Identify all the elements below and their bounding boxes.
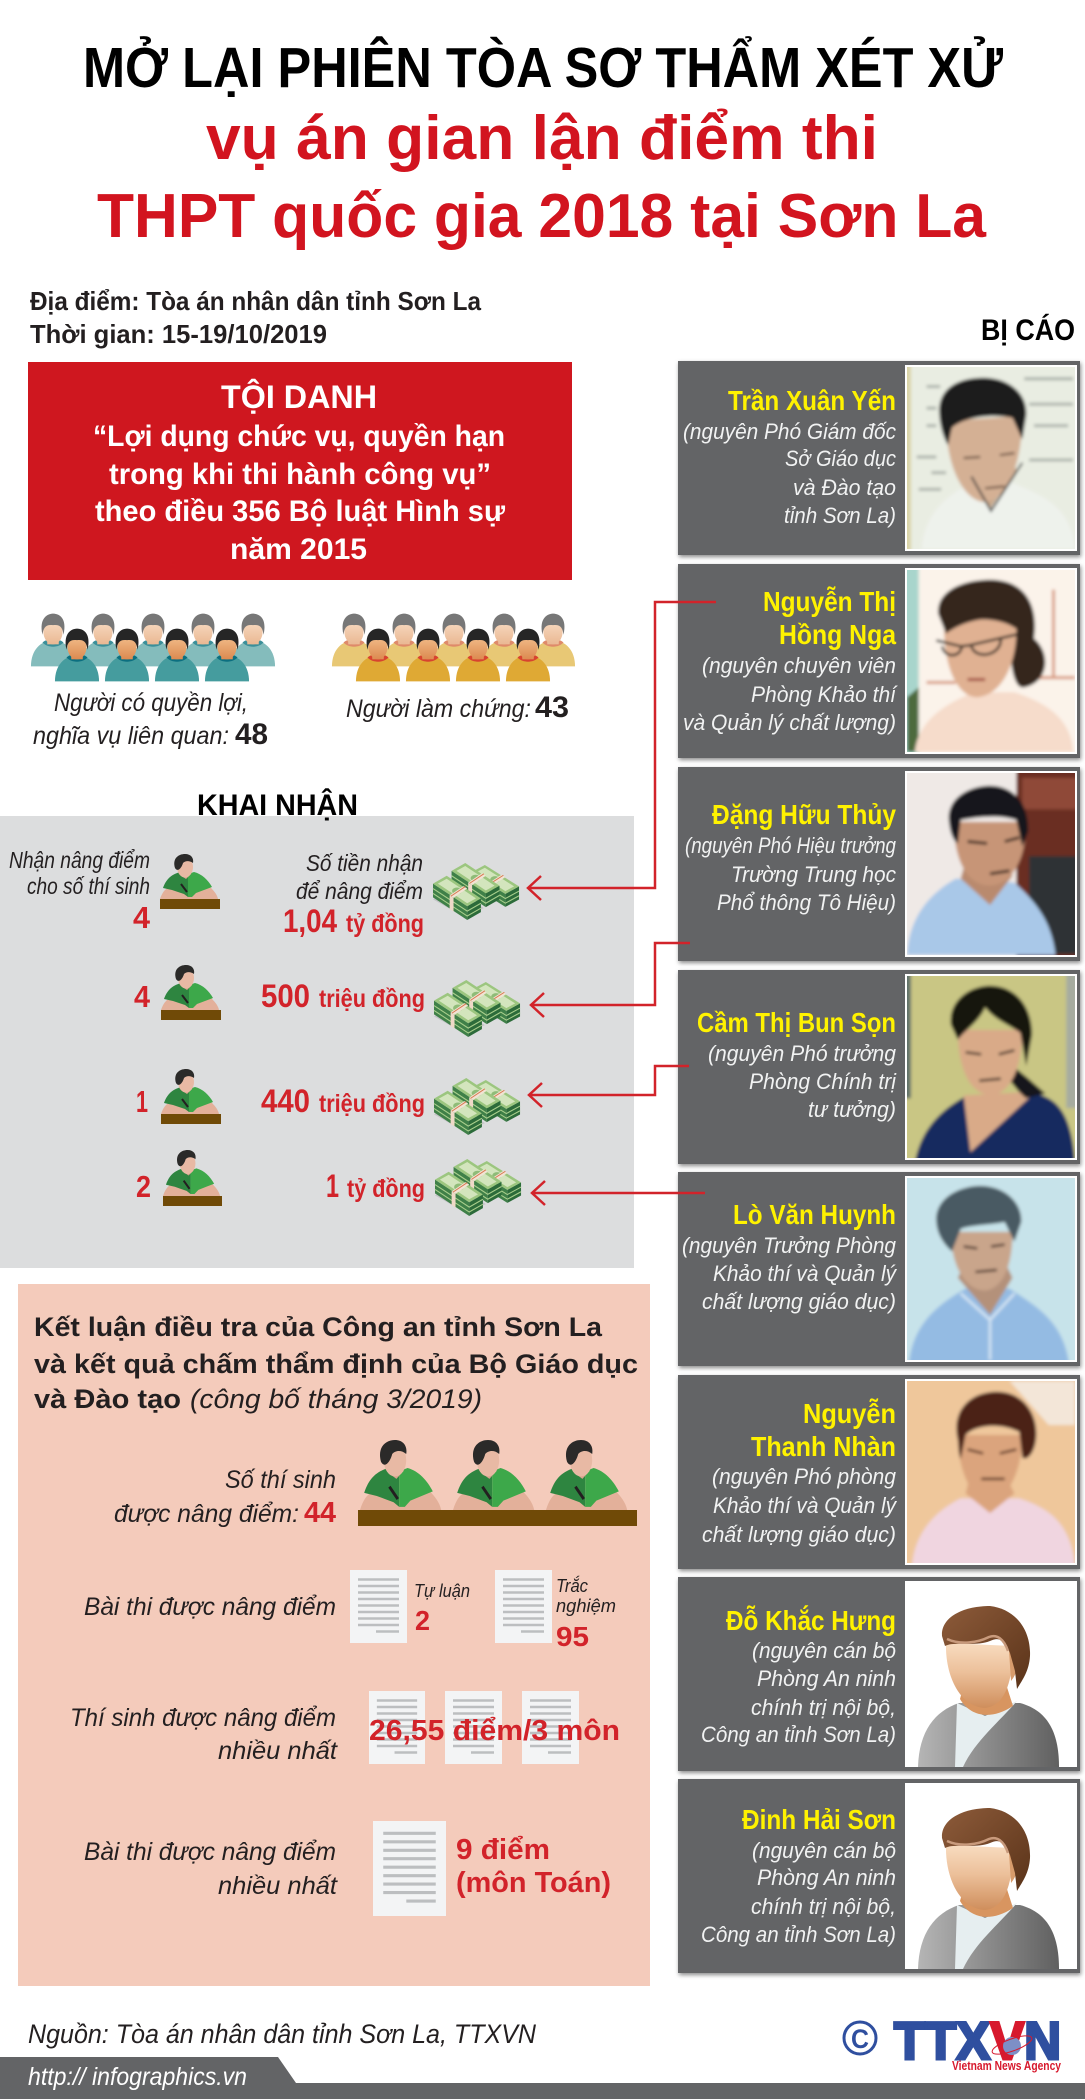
card: Lò Văn Huynh: Khảo thí và Quản lý <box>713 1261 898 1286</box>
card: Đỗ Khắc Hưng: (nguyên cán bộ <box>752 1638 896 1663</box>
location and time <box>30 286 481 349</box>
card: Nguyễn Thị Hồng Nga <box>678 564 1081 760</box>
card: Nguyễn Thanh Nhàn: Nguyễn <box>803 1398 896 1429</box>
confession heading: KHAI NHẬN <box>197 788 358 822</box>
arrow: Nguyễn Thị Hồng Nga to row 1 <box>528 602 716 900</box>
website: http:// infographics.vn <box>28 2063 247 2091</box>
card: Đặng Hữu Thủy: (nguyên Phó Hiệu trưởng <box>685 833 896 858</box>
students raised label: được nâng điểm: <box>114 1500 299 1528</box>
card: Đỗ Khắc Hưng <box>678 1577 1081 1773</box>
witnesses label: Người làm chứng: <box>346 695 531 723</box>
card: Nguyễn Thị Hồng Nga: Phòng Khảo thí <box>751 682 899 707</box>
row 1: 1,04 <box>283 903 337 939</box>
row 2: triệu đồng <box>319 985 425 1013</box>
card: Trần Xuân Yến: và Đào tạo <box>793 475 896 500</box>
column label: money <box>296 850 423 904</box>
card: Trần Xuân Yến: tỉnh Sơn La) <box>784 503 896 528</box>
footer bar <box>0 2057 1085 2099</box>
card: Đinh Hải Sơn: Công an tỉnh Sơn La) <box>701 1922 896 1947</box>
row 4 <box>136 1150 521 1216</box>
logo <box>844 2012 1062 2073</box>
charge text: “Lợi dụng chức vụ, quyền hạn <box>93 420 505 453</box>
card: Nguyễn Thị Hồng Nga: và Quản lý chất lượng) <box>683 710 896 735</box>
row 4: 2 <box>136 1169 151 1204</box>
conclusion heading: (công bố tháng 3/2019) <box>190 1384 482 1414</box>
card: Đặng Hữu Thủy <box>678 767 1081 963</box>
related persons label: Người có quyền lợi, <box>54 689 248 717</box>
TTXVN wordmark: TTXVN <box>894 2012 1061 2071</box>
charge heading: TỘI DANH <box>221 379 377 415</box>
card: Lò Văn Huynh <box>678 1172 1081 1368</box>
row 4: tỷ đồng <box>347 1175 425 1203</box>
conclusion heading: Kết luận điều tra của Công an tỉnh Sơn La <box>34 1312 603 1342</box>
row 1: 4 <box>133 900 151 935</box>
papers raised row: 2 <box>415 1605 430 1636</box>
card: Trần Xuân Yến: (nguyên Phó Giám đốc <box>683 419 896 444</box>
arrow: Đặng Hữu Thủy to row 2 <box>531 943 690 1017</box>
card: Đặng Hữu Thủy: Đặng Hữu Thủy <box>712 799 896 830</box>
related persons label: nghĩa vụ liên quan: <box>33 722 229 750</box>
top paper raised row: 9 điểm <box>456 1834 550 1866</box>
top paper raised row <box>84 1821 611 1916</box>
charge text: theo điều 356 Bộ luật Hình sự <box>95 495 505 528</box>
card: Nguyễn Thanh Nhàn: chất lượng giáo dục) <box>702 1522 896 1547</box>
card: Đỗ Khắc Hưng: Phòng An ninh <box>757 1666 896 1691</box>
card: Đinh Hải Sơn: chính trị nội bộ, <box>751 1894 896 1919</box>
card: Nguyễn Thị Hồng Nga: Nguyễn Thị <box>763 586 896 617</box>
icon group: witnesses <box>332 614 575 681</box>
portrait <box>907 1178 1075 1360</box>
arrow: Cầm Thị Bun Sọn to row 3 <box>529 1066 689 1107</box>
card: Lò Văn Huynh: Lò Văn Huynh <box>733 1199 896 1230</box>
row 1 <box>133 854 519 939</box>
source: Nguồn: Tòa án nhân dân tỉnh Sơn La, TTXVN <box>28 2019 536 2049</box>
panel: investigation conclusion <box>18 1284 650 1986</box>
papers raised row: Bài thi được nâng điểm <box>84 1593 336 1621</box>
card: Cầm Thị Bun Sọn: (nguyên Phó trưởng <box>708 1041 896 1066</box>
copyright mark <box>844 2022 876 2054</box>
row 3: triệu đồng <box>319 1090 425 1118</box>
top student raised row: nhiều nhất <box>218 1737 338 1765</box>
charge text <box>93 420 505 566</box>
students raised label: Số thí sinh <box>225 1466 336 1494</box>
card: Nguyễn Thị Hồng Nga: Hồng Nga <box>779 619 896 650</box>
row 4: 1 <box>326 1168 339 1204</box>
portrait <box>907 1381 1075 1563</box>
card: Đặng Hữu Thủy: Phổ thông Tô Hiệu) <box>717 890 896 915</box>
papers raised row: 95 <box>556 1621 589 1652</box>
card: Trần Xuân Yến: Trần Xuân Yến <box>728 385 896 416</box>
papers raised row: Tự luận <box>414 1581 470 1601</box>
top student raised row <box>70 1691 620 1765</box>
top paper raised row: nhiều nhất <box>218 1872 338 1900</box>
card: Trần Xuân Yến <box>678 361 1081 557</box>
icon group: related persons <box>31 614 275 681</box>
row 2: 4 <box>134 979 151 1014</box>
card: Nguyễn Thanh Nhàn: (nguyên Phó phòng <box>712 1464 896 1489</box>
card: Nguyễn Thanh Nhàn: Thanh Nhàn <box>751 1431 896 1462</box>
icon: anonymous avatar <box>918 1606 1059 1767</box>
card: Đinh Hải Sơn: Đinh Hải Sơn <box>742 1804 896 1835</box>
column label: money: để nâng điểm <box>296 878 423 904</box>
witnesses label: 43 <box>535 691 569 724</box>
card: Nguyễn Thanh Nhàn <box>678 1375 1081 1571</box>
card: Đỗ Khắc Hưng: chính trị nội bộ, <box>751 1695 896 1720</box>
panel: confession <box>0 788 634 1268</box>
related persons label <box>33 689 268 751</box>
card: Đặng Hữu Thủy: Trường Trung học <box>731 862 896 887</box>
card: Trần Xuân Yến: Sở Giáo dục <box>785 446 896 471</box>
top student raised row: Thí sinh được nâng điểm <box>70 1704 336 1732</box>
column label: students: cho số thí sinh <box>27 873 150 899</box>
card: Lò Văn Huynh: chất lượng giáo dục) <box>702 1289 896 1314</box>
charge text: trong khi thi hành công vụ” <box>109 458 491 491</box>
card: Cầm Thị Bun Sọn <box>678 970 1081 1166</box>
row 3: 440 <box>261 1083 310 1119</box>
title line 2: vụ án gian lận điểm thi <box>206 104 878 173</box>
card: Đinh Hải Sơn <box>678 1779 1081 1975</box>
top student raised row: 26,55 điểm/3 môn <box>369 1715 620 1747</box>
conclusion heading <box>34 1312 638 1414</box>
students raised label <box>114 1466 336 1529</box>
conclusion heading: và kết quả chấm thẩm định của Bộ Giáo dục <box>34 1349 638 1379</box>
row 2 <box>134 965 520 1037</box>
panel: charge <box>28 362 572 580</box>
portrait <box>907 367 1075 549</box>
location: Địa điểm: Tòa án nhân dân tỉnh Sơn La <box>30 286 481 316</box>
copyright mark: C <box>851 2024 869 2054</box>
row 3 <box>136 1069 520 1135</box>
portrait <box>907 976 1075 1158</box>
papers raised row: nghiệm <box>556 1596 616 1616</box>
column label: students <box>9 847 150 899</box>
conclusion heading: và Đào tạo <box>34 1384 181 1414</box>
card: Đinh Hải Sơn: Phòng An ninh <box>757 1865 896 1890</box>
title line 3: THPT quốc gia 2018 tại Sơn La <box>97 182 987 251</box>
row 3: 1 <box>136 1084 148 1119</box>
card: Cầm Thị Bun Sọn: Cầm Thị Bun Sọn <box>697 1007 896 1038</box>
icon: three students at desk <box>358 1440 637 1526</box>
row 2: 500 <box>261 978 310 1014</box>
card: Đinh Hải Sơn: (nguyên cán bộ <box>752 1838 896 1863</box>
column label: money: Số tiền nhận <box>306 850 423 876</box>
card: Lò Văn Huynh: (nguyên Trưởng Phòng <box>682 1233 896 1258</box>
column label: students: Nhận nâng điểm <box>9 847 150 873</box>
card: Đỗ Khắc Hưng: Công an tỉnh Sơn La) <box>701 1722 896 1747</box>
row 1: tỷ đồng <box>346 910 424 938</box>
card: Cầm Thị Bun Sọn: Phòng Chính trị <box>749 1069 897 1094</box>
top paper raised row: Bài thi được nâng điểm <box>84 1838 336 1866</box>
heading: defendants: BỊ CÁO <box>981 313 1075 347</box>
icon: anonymous avatar <box>918 1808 1059 1969</box>
arrow: Lò Văn Huynh to row 4 <box>532 1181 705 1205</box>
card: Nguyễn Thanh Nhàn: Khảo thí và Quản lý <box>713 1493 898 1518</box>
students raised label: 44 <box>304 1497 336 1529</box>
charge text: năm 2015 <box>230 533 367 566</box>
time: Thời gian: 15-19/10/2019 <box>30 319 327 349</box>
portrait <box>907 570 1075 752</box>
title <box>83 35 1004 251</box>
card: Đỗ Khắc Hưng: Đỗ Khắc Hưng <box>726 1605 896 1636</box>
papers raised row <box>84 1570 616 1652</box>
card: Cầm Thị Bun Sọn: tư tưởng) <box>808 1097 896 1122</box>
globe <box>990 2032 1034 2058</box>
portrait <box>907 773 1075 955</box>
top paper raised row: (môn Toán) <box>456 1867 611 1899</box>
papers raised row: Trắc <box>556 1576 588 1596</box>
card: Nguyễn Thị Hồng Nga: (nguyên chuyên viên <box>702 653 896 678</box>
related persons label: 48 <box>235 718 268 751</box>
